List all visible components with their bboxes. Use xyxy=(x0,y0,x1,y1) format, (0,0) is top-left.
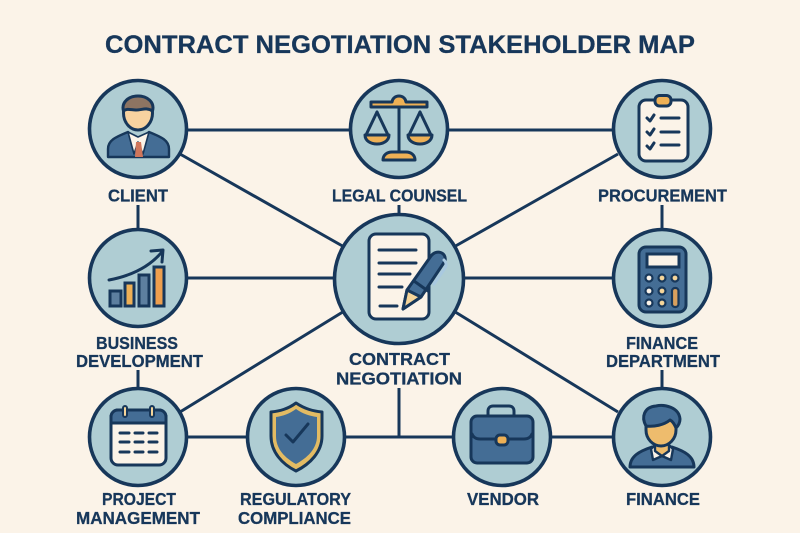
label: contract negotiation: CONTRACT xyxy=(349,349,450,369)
icon: scales xyxy=(365,96,432,160)
icon: briefcase xyxy=(471,406,533,463)
label: contract negotiation xyxy=(336,349,462,388)
node: finance department xyxy=(606,230,720,371)
node: legal counsel xyxy=(332,80,467,206)
node: finance xyxy=(614,388,710,509)
label: finance department xyxy=(606,333,720,371)
node: vendor xyxy=(454,388,550,509)
icon: calendar xyxy=(111,406,166,465)
node: contract negotiation xyxy=(334,214,464,388)
icon: businessman xyxy=(108,96,169,157)
icon: shield xyxy=(271,403,322,471)
label: finance department: FINANCE xyxy=(626,333,698,353)
label: finance department: DEPARTMENT xyxy=(606,351,720,371)
node: business development xyxy=(76,230,203,371)
icon: contract document and pen xyxy=(369,234,446,319)
node: regulatory compliance xyxy=(238,388,351,528)
label: regulatory compliance: COMPLIANCE xyxy=(238,508,351,528)
label: business development: BUSINESS xyxy=(96,333,178,353)
node: client xyxy=(90,80,186,206)
label: contract negotiation: NEGOTIATION xyxy=(336,368,462,388)
title: CONTRACT NEGOTIATION STAKEHOLDER MAP xyxy=(105,31,695,59)
icon: calculator xyxy=(639,247,686,312)
icon: clipboard xyxy=(639,96,688,161)
label: project management xyxy=(76,489,200,528)
connector lines xyxy=(138,130,662,437)
node: procurement xyxy=(598,80,727,206)
label: project management: MANAGEMENT xyxy=(76,508,200,528)
label: business development xyxy=(76,333,203,371)
label: finance: FINANCE xyxy=(626,489,700,509)
label: vendor: VENDOR xyxy=(467,489,539,509)
label: regulatory compliance xyxy=(238,489,351,528)
label: legal counsel: LEGAL COUNSEL xyxy=(332,186,467,206)
node: project management xyxy=(76,388,200,528)
label: business development: DEVELOPMENT xyxy=(76,351,203,371)
label: client: CLIENT xyxy=(108,186,168,206)
icon: finance person xyxy=(630,405,694,467)
label: regulatory compliance: REGULATORY xyxy=(240,489,351,509)
label: project management: PROJECT xyxy=(102,489,176,509)
label: procurement: PROCUREMENT xyxy=(598,186,727,206)
icon: growth chart xyxy=(109,250,164,306)
